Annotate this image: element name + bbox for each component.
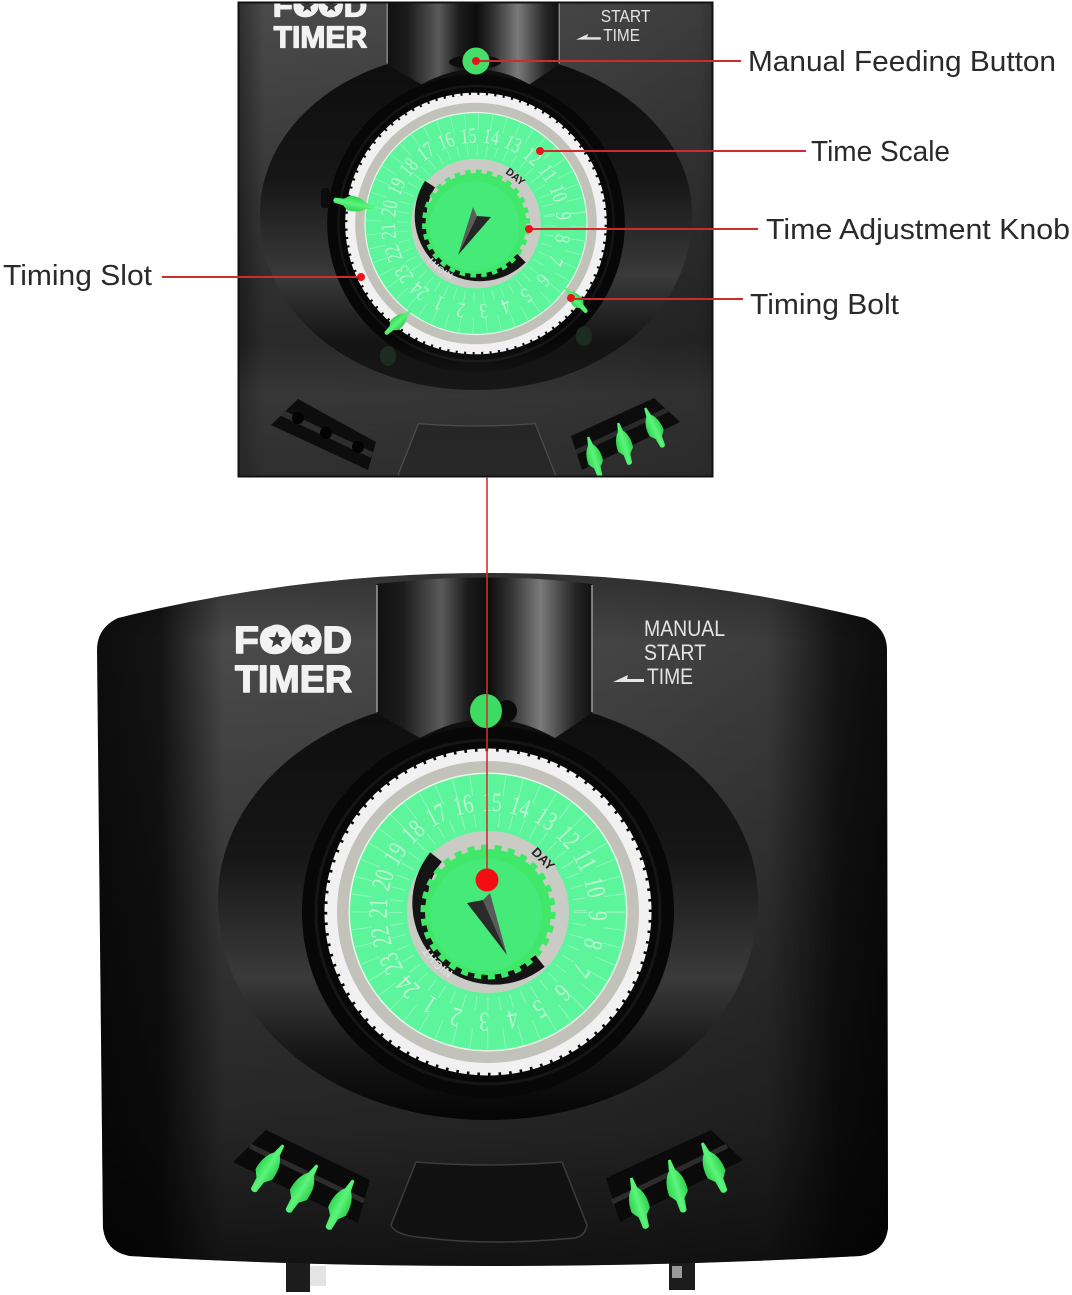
grey day ring and dark night arc	[407, 831, 569, 993]
hour numbers: 16	[450, 788, 476, 822]
brand logo: FOOD TIMER: FOOD	[234, 620, 352, 662]
close-up dial: 14	[481, 124, 501, 150]
callout: Timing Bolt	[567, 289, 899, 321]
close-up dial: 8	[550, 233, 575, 245]
panel: close-up of the timer: TIME	[603, 25, 640, 45]
hour numbers: 6	[549, 978, 577, 1007]
close-up dial: 15	[459, 123, 477, 149]
close-up dial: 18	[394, 153, 423, 181]
close-up dial: NIGHT	[426, 258, 453, 279]
hour numbers: 22	[364, 924, 398, 950]
close-up dial: 20	[376, 198, 403, 218]
hour numbers: 23	[373, 948, 409, 980]
DAY label: DAY	[529, 844, 558, 874]
close-up timing bolts on dial	[321, 188, 592, 366]
close-up dial: 4	[498, 293, 514, 319]
callout: Manual Feeding Button	[472, 46, 1056, 78]
right timing bolts in storage slot	[606, 1130, 743, 1232]
hour numbers: 12	[551, 819, 586, 855]
hour numbers	[359, 783, 617, 1041]
close-up slot with bolts	[571, 398, 680, 480]
hour numbers: 5	[528, 994, 551, 1025]
panel: close-up of the timer: START	[601, 6, 651, 26]
close-up dial: 16	[434, 127, 458, 155]
hour numbers: 13	[530, 801, 563, 837]
main feeder unit	[97, 573, 888, 1266]
close-up arrow pointer	[458, 207, 491, 255]
close-up dial: 10	[544, 182, 573, 205]
callout: Time Adjustment Knob	[525, 214, 1070, 246]
hour numbers: 21	[363, 898, 393, 919]
hour numbers: 18	[395, 814, 431, 849]
hour numbers: 19	[377, 837, 413, 870]
callout: Timing Slot	[3, 260, 365, 292]
callout: vertical connector and centre dot	[476, 477, 498, 892]
close-up dial: 24	[406, 276, 433, 305]
arrow pointer	[467, 893, 507, 955]
hour numbers: 4	[504, 1003, 521, 1035]
hour numbers: 3	[479, 1007, 490, 1037]
close-up dial: 9	[551, 211, 576, 221]
close-up dial: 1	[430, 291, 448, 316]
panel: close-up of the timer: TIMER	[274, 21, 367, 55]
hour numbers: 9	[583, 910, 613, 921]
callout: Time Scale: Time Scale	[811, 136, 950, 168]
close-up dial: 23	[390, 260, 418, 287]
panel: close-up of the timer	[240, 0, 712, 476]
close-up dial: 21	[376, 222, 401, 240]
close-up dial: 6	[531, 269, 555, 291]
time scale disk	[350, 774, 626, 1050]
close-up dial: 12	[519, 142, 546, 171]
manual feeding button	[470, 694, 517, 728]
timer dial	[324, 748, 652, 1076]
printed label: manual start time	[613, 616, 725, 689]
close-up manual feeding button	[449, 48, 501, 74]
printed label: manual start time: TIME	[647, 664, 693, 689]
printed label: manual start time: START	[644, 640, 706, 665]
hour numbers: 8	[577, 935, 609, 953]
brand logo: FOOD TIMER	[234, 620, 352, 701]
feeder body shell	[97, 573, 888, 1266]
callout: Timing Bolt: Timing Bolt	[750, 289, 899, 321]
close-up dial: 22	[379, 242, 408, 265]
toothed outer ring	[326, 750, 650, 1074]
hour numbers: 11	[567, 844, 603, 876]
left timing bolts in storage slot	[233, 1130, 370, 1234]
callout: Time Scale	[536, 136, 950, 168]
callout: Manual Feeding Button: Manual Feeding Button	[748, 46, 1056, 78]
callout: Time Adjustment Knob: Time Adjustment Knob	[766, 214, 1070, 246]
close-up dial: 2	[455, 297, 467, 322]
NIGHT label: NIGHT	[422, 948, 453, 978]
hour numbers: 20	[366, 866, 400, 894]
close-up dial: 5	[516, 283, 537, 308]
hour numbers: 15	[481, 787, 502, 817]
close-up dial: DAY	[503, 167, 526, 188]
hour numbers: 10	[578, 874, 612, 900]
close-up dial: 3	[479, 299, 489, 323]
panel border	[238, 2, 712, 476]
hour numbers: 24	[390, 969, 425, 1005]
close-up dial: 7	[543, 252, 568, 269]
callout: Timing Slot: Timing Slot	[3, 260, 152, 292]
close-up dial: 13	[501, 130, 525, 158]
printed label: manual start time: MANUAL	[644, 616, 725, 641]
hour numbers: 14	[506, 790, 534, 824]
hour numbers: 1	[418, 990, 442, 1021]
hour numbers: 17	[420, 797, 452, 833]
close-up dial	[345, 92, 607, 354]
close-up dial: 11	[534, 160, 562, 187]
close-up dial: 17	[412, 137, 439, 166]
hour numbers: 2	[447, 1001, 465, 1033]
close-up empty bolt slot with holes	[271, 399, 376, 470]
feeder feet	[286, 1262, 695, 1292]
hour numbers: 7	[566, 958, 597, 982]
time adjustment knob gear	[423, 847, 553, 977]
close-up dial: 19	[382, 174, 411, 199]
brand logo: FOOD TIMER: TIMER	[235, 659, 352, 701]
